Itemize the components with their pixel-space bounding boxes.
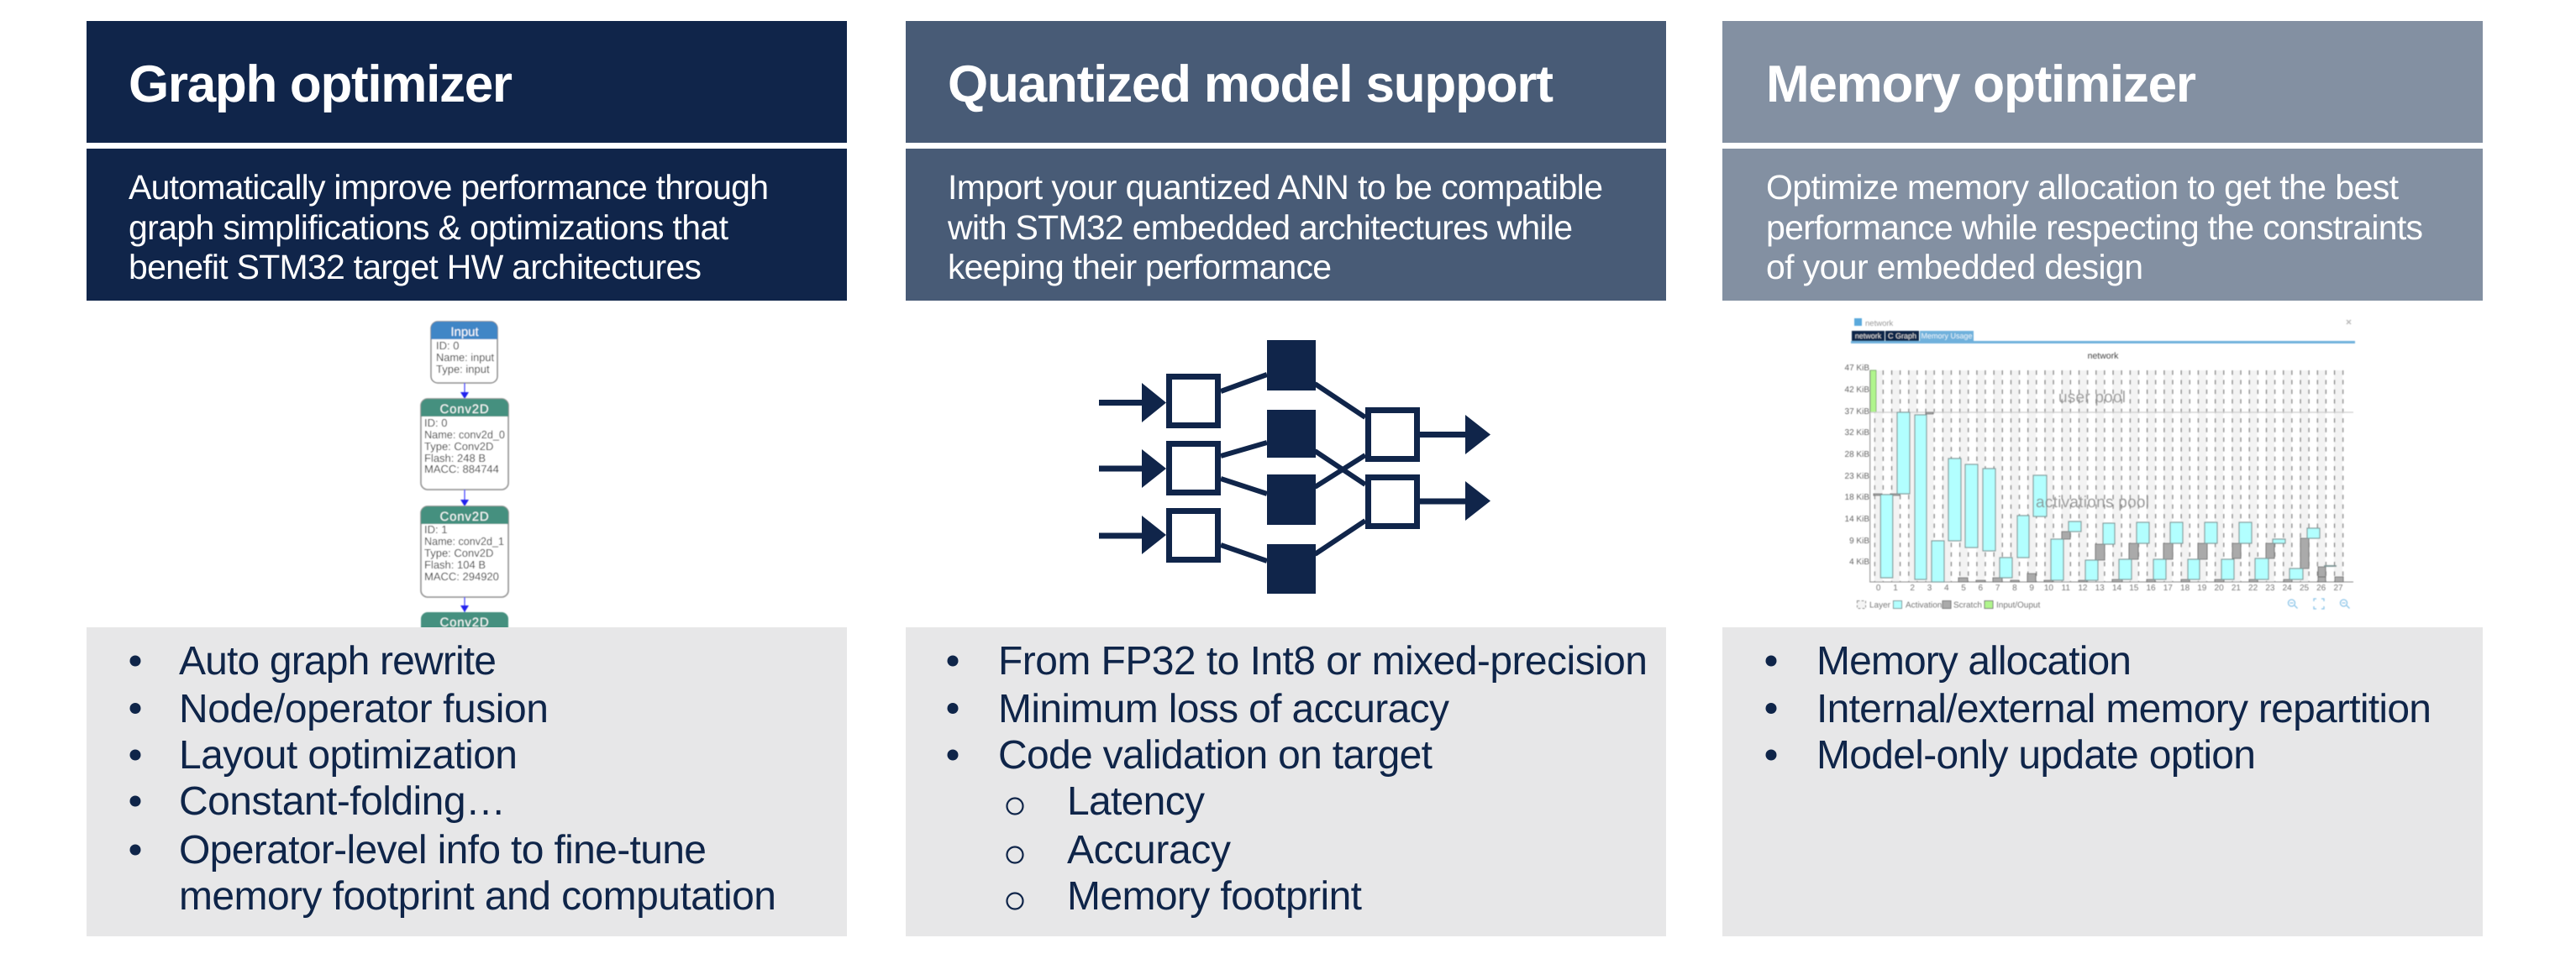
window title bar <box>1854 318 2351 328</box>
x axis labels <box>1876 584 2343 593</box>
x axis labels: 23 <box>2265 584 2275 593</box>
x axis labels: 19 <box>2197 584 2207 593</box>
chart legend: Layer <box>1869 601 1891 610</box>
connections between layers <box>1221 375 1365 561</box>
chart title: network <box>2088 351 2119 361</box>
node: input: Input <box>450 325 480 339</box>
node: input: Name: input <box>436 351 494 364</box>
icon: neural network diagram <box>1099 340 1490 594</box>
bullet: node operator fusion: Node/operator fusion <box>179 687 549 731</box>
node: conv2d 0: Type: Conv2D <box>424 440 493 453</box>
x axis labels: 21 <box>2232 584 2241 593</box>
sub-bullet: memory footprint: Memory footprint <box>1067 874 1362 919</box>
arrow: input to conv2d <box>460 383 469 399</box>
node: input <box>431 322 497 383</box>
sub-bullet: latency <box>1007 779 1205 824</box>
window tabs: Memory Usage <box>1921 332 1973 340</box>
y axis labels: 9 KiB <box>1849 537 1869 546</box>
x axis labels: 6 <box>1979 584 1984 593</box>
bullet: auto graph rewrite: Auto graph rewrite <box>179 639 497 684</box>
description: quantized model support: keeping their performance <box>948 248 1332 286</box>
bullet: internal external memory repartition: Internal/external memory repartition <box>1816 687 2431 731</box>
panel: graph optimizer <box>87 21 847 936</box>
window tabs <box>1851 331 2355 343</box>
x axis labels: 12 <box>2078 584 2088 593</box>
node: conv2d 1: Flash: 104 B <box>424 558 486 571</box>
x axis labels: 26 <box>2316 584 2326 593</box>
heading: graph optimizer <box>87 21 847 143</box>
pool labels: user pool <box>2058 389 2126 406</box>
heading: quantized model support <box>906 21 1666 143</box>
icons: zoom controls <box>2289 599 2349 609</box>
chart legend: Scratch <box>1953 601 1982 610</box>
x axis labels: 22 <box>2248 584 2258 593</box>
chart legend <box>1857 601 2040 610</box>
list: memory optimizer features <box>1722 627 2483 936</box>
description: quantized model support: Import your quantized ANN to be compatible <box>948 168 1603 207</box>
x axis labels: 18 <box>2180 584 2190 593</box>
y axis labels: 28 KiB <box>1845 450 1869 459</box>
activation blocks <box>1880 412 2337 582</box>
bullet: constant folding: Constant-folding… <box>179 779 506 824</box>
x axis labels: 13 <box>2095 584 2105 593</box>
bullet: minimum loss of accuracy: Minimum loss of accuracy <box>998 687 1449 731</box>
description: graph optimizer: graph simplifications & optimizations that <box>129 208 729 247</box>
x axis labels: 16 <box>2146 584 2156 593</box>
x axis labels: 20 <box>2215 584 2224 593</box>
heading: quantized model support: Quantized model support <box>948 55 1553 113</box>
panel: memory optimizer <box>1722 21 2483 936</box>
x axis labels: 14 <box>2112 584 2121 593</box>
node: input: ID: 0 <box>436 339 459 352</box>
x axis labels: 7 <box>1995 584 2000 593</box>
x axis labels: 1 <box>1893 584 1898 593</box>
layer columns <box>1874 370 2347 582</box>
heading: memory optimizer: Memory optimizer <box>1766 55 2196 113</box>
description: quantized model support <box>906 149 1666 301</box>
input layer nodes <box>1170 376 1218 559</box>
bullet: memory allocation: Memory allocation <box>1816 639 2132 684</box>
x axis labels: 10 <box>2044 584 2053 593</box>
chart: graph flow diagram <box>421 322 508 638</box>
x axis labels: 9 <box>2029 584 2034 593</box>
x axis labels: 8 <box>2012 584 2017 593</box>
x axis labels: 15 <box>2129 584 2139 593</box>
node: conv2d 0: Flash: 248 B <box>424 452 486 464</box>
x axis labels: 4 <box>1944 584 1949 593</box>
description: memory optimizer <box>1722 149 2483 301</box>
description: quantized model support: with STM32 embedded architectures while <box>947 208 1573 247</box>
node: conv2d 0: Conv2D <box>440 402 489 417</box>
node: input: Type: input <box>436 363 490 375</box>
chart legend: Input/Ouput <box>1996 601 2040 610</box>
x axis labels: 5 <box>1961 584 1966 593</box>
node: conv2d 0: ID: 0 <box>424 417 447 429</box>
node: conv2d 0: Name: conv2d_0 <box>424 428 505 441</box>
y axis labels: 37 KiB <box>1845 407 1869 417</box>
node: conv2d 1: Conv2D <box>440 510 489 524</box>
hidden layer nodes <box>1267 340 1316 594</box>
description: graph optimizer <box>87 149 847 301</box>
arrow: conv2d 0 to conv2d 1 <box>460 490 469 506</box>
y axis labels <box>1845 364 1869 567</box>
node: conv2d 1: ID: 1 <box>424 523 447 536</box>
chart: memory usage window <box>1845 318 2355 610</box>
node: conv2d 2 cropped <box>420 611 509 627</box>
pool labels <box>2036 389 2149 511</box>
bullet: fp32 to int8: From FP32 to Int8 or mixed-precision <box>998 639 1648 684</box>
x axis labels: 11 <box>2062 584 2070 593</box>
y axis labels: 47 KiB <box>1845 364 1869 373</box>
description: graph optimizer: Automatically improve performance through <box>129 168 769 207</box>
description: memory optimizer: Optimize memory allocation to get the best <box>1766 168 2400 207</box>
list: quantized model features <box>906 627 1666 936</box>
description: graph optimizer: benefit STM32 target HW architectures <box>129 248 702 286</box>
input output block <box>1870 370 1876 412</box>
axes and pool divider <box>1870 370 2353 582</box>
y axis labels: 23 KiB <box>1845 472 1869 481</box>
node: conv2d 0 <box>421 399 508 490</box>
heading: graph optimizer: Graph optimizer <box>129 55 513 113</box>
node: conv2d 0: MACC: 884744 <box>424 463 499 475</box>
bullet: operator level info: memory footprint and computation <box>179 874 776 919</box>
arrows: network outputs <box>1420 415 1490 521</box>
node: conv2d 1: MACC: 294920 <box>424 570 499 583</box>
x axis labels: 3 <box>1927 584 1932 593</box>
window title bar: network <box>1865 319 1894 328</box>
y axis labels: 14 KiB <box>1845 515 1869 524</box>
bullet: operator level info <box>129 828 776 919</box>
node: conv2d 1: Name: conv2d_1 <box>424 535 504 548</box>
y axis labels: 32 KiB <box>1845 428 1869 438</box>
x axis labels: 25 <box>2300 584 2309 593</box>
panel: quantized model support <box>906 21 1666 936</box>
sub-bullet: latency: Latency <box>1067 779 1205 824</box>
bullet: layout optimization: Layout optimization <box>179 733 518 778</box>
window tabs: C Graph <box>1888 332 1916 340</box>
output layer nodes <box>1368 410 1417 526</box>
x axis labels: 24 <box>2283 584 2292 593</box>
bullet: model-only update option: Model-only update option <box>1816 733 2256 778</box>
scratch blocks <box>1874 412 2343 582</box>
y axis labels: 4 KiB <box>1849 558 1869 567</box>
x axis labels: 2 <box>1910 584 1915 593</box>
x axis labels: 27 <box>2333 584 2343 593</box>
x axis labels: 17 <box>2163 584 2173 593</box>
chart legend: Activation <box>1906 601 1942 610</box>
description: memory optimizer: performance while respecting the constraints <box>1766 208 2423 247</box>
heading: memory optimizer <box>1722 21 2483 143</box>
y axis labels: 42 KiB <box>1845 385 1869 395</box>
list: graph optimizer features <box>87 627 847 936</box>
pool labels: activations pool <box>2036 494 2149 511</box>
window tabs: network <box>1855 332 1882 340</box>
arrows: network inputs <box>1099 383 1166 554</box>
x axis labels: 0 <box>1876 584 1881 593</box>
node: conv2d 1 <box>421 506 508 597</box>
y axis labels: 18 KiB <box>1845 493 1869 502</box>
description: memory optimizer: of your embedded design <box>1766 248 2143 286</box>
node: conv2d 1: Type: Conv2D <box>424 547 493 559</box>
bullet: operator level info: Operator-level info to fine-tune <box>179 828 707 873</box>
bullet: code validation on target: Code validation on target <box>998 733 1433 778</box>
node: conv2d 2 cropped: Conv2D <box>440 616 489 630</box>
sub-bullet: accuracy: Accuracy <box>1067 828 1231 873</box>
arrow: conv2d 1 to conv2d 2 <box>460 597 469 612</box>
